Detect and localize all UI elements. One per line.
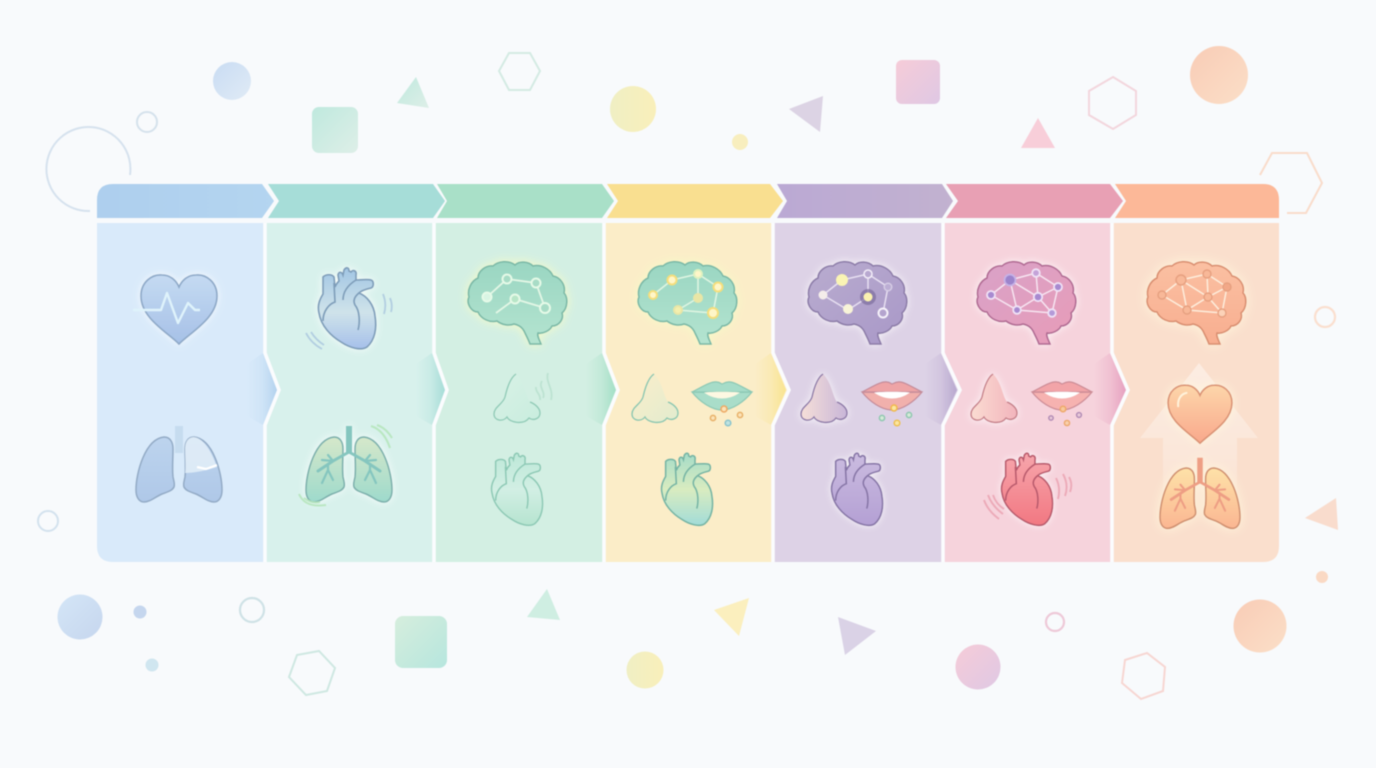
icon: lips bbox=[1032, 382, 1092, 410]
panel: stage 7 bbox=[1112, 184, 1279, 562]
panel: stage 6 bbox=[943, 184, 1128, 562]
chevron tip 5 bbox=[925, 353, 957, 425]
header chevron 5 bbox=[777, 184, 953, 218]
header chevron 3 bbox=[437, 184, 614, 218]
lung breath waves bbox=[299, 425, 392, 506]
heart tremor waves bbox=[306, 294, 392, 349]
chevron tip 1 bbox=[247, 353, 277, 425]
taste particles bbox=[879, 405, 912, 426]
chevron tip 6 bbox=[1094, 353, 1126, 425]
header chevron 7 bbox=[1115, 184, 1279, 218]
panel body 4 bbox=[604, 223, 789, 562]
icon: brain with dense network bbox=[977, 262, 1076, 344]
column dividers bbox=[265, 223, 1128, 562]
heart palpitation waves bbox=[984, 474, 1071, 519]
panel: stage 1 bbox=[97, 184, 279, 562]
chevron tip 4 bbox=[755, 353, 786, 425]
header chevron 6 bbox=[946, 184, 1123, 218]
header chevron 1 bbox=[97, 184, 274, 218]
panel: stage 4 bbox=[604, 184, 789, 562]
panel: stage 5 bbox=[773, 184, 960, 562]
smell waves bbox=[536, 373, 552, 400]
pulse line bbox=[133, 293, 200, 323]
icon: heart with pulse bbox=[141, 275, 217, 344]
header chevron 2 bbox=[268, 184, 445, 218]
icon: glowing brain bbox=[1147, 262, 1246, 344]
panel body 2 bbox=[265, 223, 447, 562]
icon: nose bbox=[971, 374, 1017, 422]
icon: lips bbox=[692, 382, 752, 410]
panel: stage 2 bbox=[265, 184, 447, 562]
icon: nose bbox=[632, 374, 678, 422]
upward arrow bbox=[1140, 363, 1258, 520]
icon: recovering heart bbox=[662, 453, 713, 525]
panel body 3 bbox=[434, 223, 618, 562]
icon: nose bbox=[801, 374, 847, 422]
icon: nose bbox=[494, 374, 540, 422]
taste particles bbox=[710, 406, 743, 426]
icon: glowing lungs bbox=[1160, 458, 1240, 528]
icon: shaky heart bbox=[318, 268, 376, 349]
icon: pale heart bbox=[492, 453, 543, 525]
panel body 5 bbox=[773, 223, 960, 562]
icon: faded lungs bbox=[136, 426, 222, 502]
panel: stage 3 bbox=[434, 184, 618, 562]
chevron tip 3 bbox=[586, 353, 616, 425]
icon: lips bbox=[862, 382, 922, 410]
icon: brain with mixed nodes bbox=[808, 262, 907, 344]
taste particles bbox=[1049, 406, 1081, 426]
icon: brain with few connections bbox=[468, 262, 567, 344]
panel body 1 bbox=[97, 223, 279, 562]
chevron tip 2 bbox=[416, 353, 445, 425]
icon: lungs bbox=[306, 426, 392, 502]
panel body 6 bbox=[943, 223, 1128, 562]
panel body 7 bbox=[1112, 223, 1279, 562]
icon: purple heart bbox=[832, 453, 883, 525]
icon: brain with glowing nodes bbox=[638, 262, 737, 344]
icon: glowing heart bbox=[1168, 385, 1232, 443]
icon: red heart bbox=[1002, 453, 1053, 525]
header chevron 4 bbox=[607, 184, 783, 218]
